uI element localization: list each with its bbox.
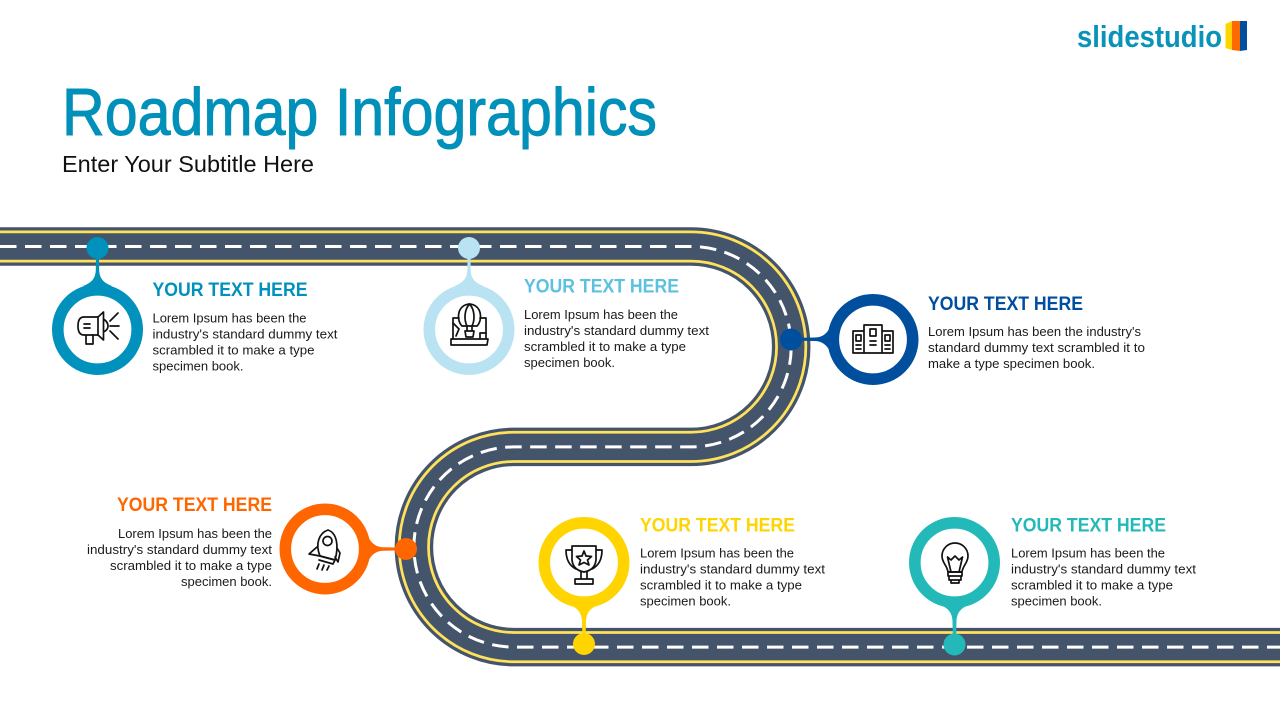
text block 6: specimen book. [1011, 594, 1102, 608]
text block 4: YOUR TEXT HERE [117, 495, 272, 516]
text block 3: YOUR TEXT HERE [928, 294, 1083, 315]
text block 6: industry's standard dummy text [1011, 562, 1196, 576]
icon: megaphone [78, 312, 119, 344]
text block 2: YOUR TEXT HERE [524, 276, 679, 298]
text block 5: industry's standard dummy text [640, 562, 825, 576]
text block 2: specimen book. [524, 355, 615, 370]
text block 4: scrambled it to make a type [110, 558, 272, 573]
text block 3: standard dummy text scrambled it to [928, 340, 1145, 355]
title: Roadmap Infographics [62, 75, 657, 150]
text block 6 [1011, 516, 1196, 608]
text block 1: YOUR TEXT HERE [152, 280, 308, 301]
text block 4 [87, 495, 272, 589]
icon: light bulb [942, 543, 968, 583]
text block 6: Lorem Ipsum has been the [1011, 546, 1165, 560]
text block 3: make a type specimen book. [928, 356, 1095, 371]
text block 5: specimen book. [640, 594, 731, 608]
text block 1 [152, 280, 338, 374]
icon: balloon over laptop [451, 304, 488, 345]
text block 5: Lorem Ipsum has been the [640, 546, 794, 560]
marker 2: light blue pin with balloon laptop [429, 237, 509, 369]
text block 1: industry's standard dummy text [152, 326, 338, 342]
text block 2: scrambled it to make a type [524, 339, 686, 354]
text block 4: industry's standard dummy text [87, 542, 272, 557]
winding road [0, 246, 1280, 647]
text block 2 [524, 276, 709, 370]
text block 3: Lorem Ipsum has been the industry's [928, 324, 1141, 339]
icon: rocket [309, 530, 340, 570]
text block 1: scrambled it to make a type [152, 342, 314, 358]
subtitle: Enter Your Subtitle Here [62, 151, 314, 177]
logo: slidestudio: slidestudio [1077, 19, 1222, 54]
marker 3: navy pin with books [780, 300, 913, 379]
marker 6: teal pin with light bulb [915, 523, 994, 656]
text block 6: scrambled it to make a type [1011, 578, 1173, 592]
marker 1: blue pin with megaphone [58, 237, 137, 369]
text block 1: specimen book. [152, 358, 244, 374]
text block 6: YOUR TEXT HERE [1011, 516, 1166, 536]
text block 2: industry's standard dummy text [524, 323, 709, 338]
text block 5 [640, 516, 825, 608]
text block 5: scrambled it to make a type [640, 578, 802, 592]
text block 3 [928, 294, 1145, 371]
text block 4: Lorem Ipsum has been the [118, 526, 272, 541]
text block 5: YOUR TEXT HERE [640, 516, 795, 536]
marker 5: yellow pin with trophy [544, 523, 624, 655]
icon: buildings / books [853, 325, 893, 353]
text block 4: specimen book. [181, 574, 272, 589]
marker 4: orange pin with rocket [285, 509, 417, 589]
text block 1: Lorem Ipsum has been the [152, 310, 306, 326]
icon: trophy [566, 546, 602, 584]
text block 2: Lorem Ipsum has been the [524, 307, 678, 322]
